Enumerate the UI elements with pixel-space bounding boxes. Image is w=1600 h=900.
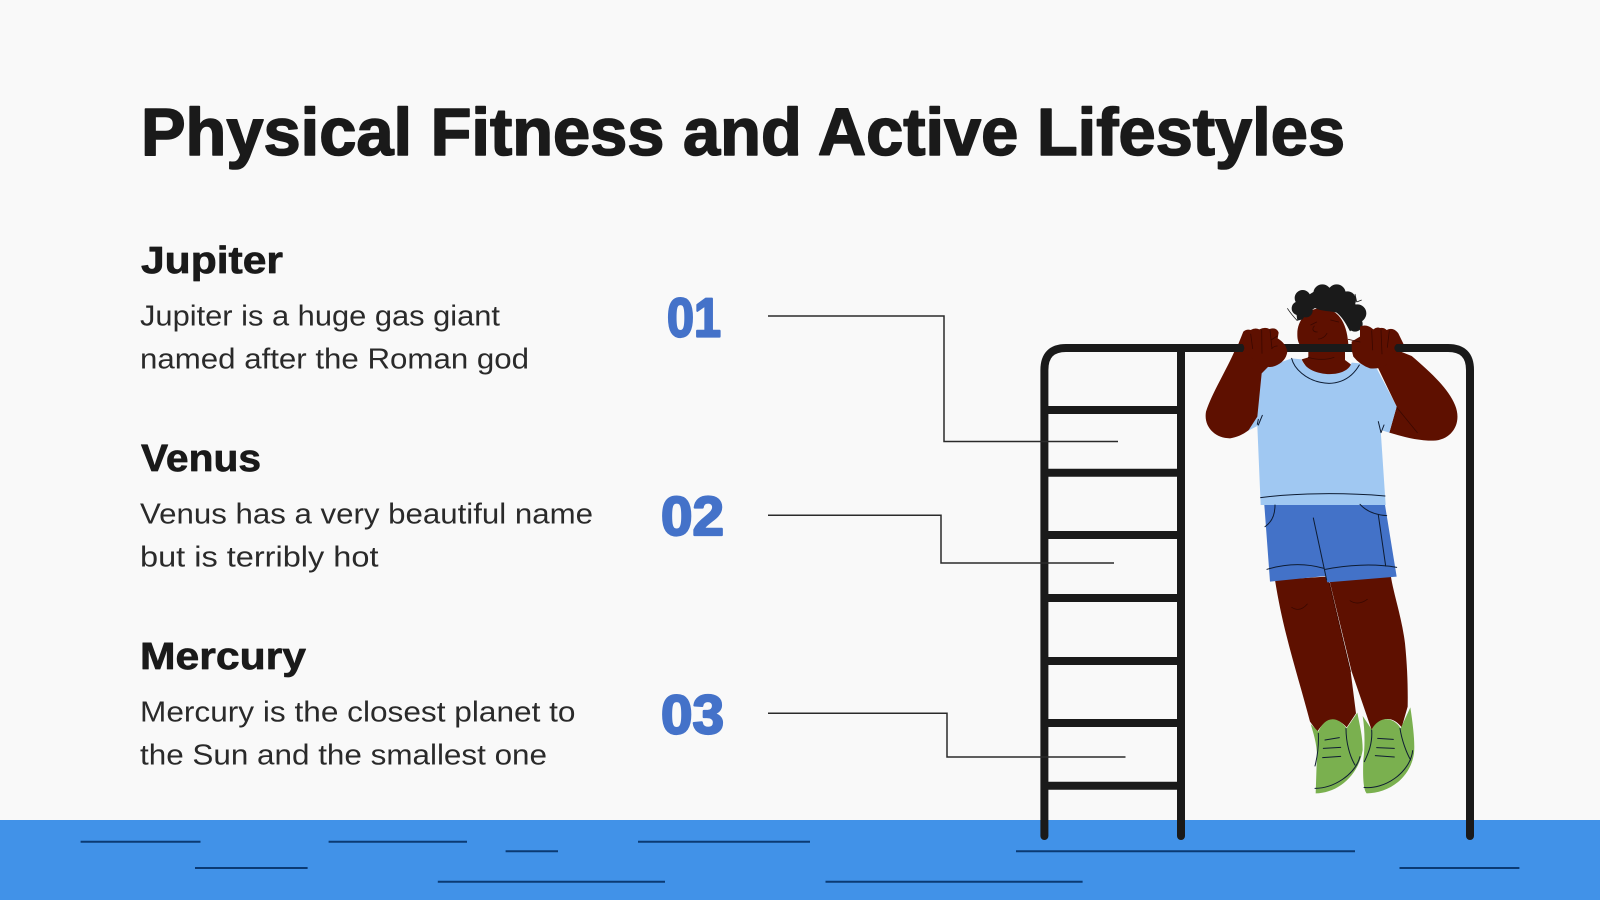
title: Physical Fitness and Active Lifestyles	[141, 95, 1345, 170]
figure: torso and arms	[1206, 325, 1457, 527]
item 2: Venus: Venus has a very beautiful name	[140, 499, 593, 531]
item 1: Jupiter	[140, 240, 529, 376]
figure: legs, shoes and shorts	[1264, 505, 1414, 793]
item 3: Mercury: the Sun and the smallest one	[140, 740, 547, 772]
shorts	[1264, 505, 1397, 582]
figure: head behind bar	[1287, 284, 1366, 376]
leg left	[1275, 577, 1356, 732]
shoe left	[1311, 713, 1363, 793]
t-shirt	[1248, 358, 1397, 527]
item 2: Venus: but is terribly hot	[140, 542, 378, 574]
item 2: Venus: Venus	[141, 438, 261, 480]
number 02: 02	[661, 485, 724, 547]
leg right	[1329, 575, 1408, 730]
bar overlay past fingers	[1230, 344, 1413, 352]
connector line 3	[768, 713, 1126, 757]
connector line 1	[768, 316, 1118, 442]
number 01: 01	[667, 286, 721, 348]
item 3: Mercury: Mercury is the closest planet to	[140, 697, 576, 729]
item 1: Jupiter: named after the Roman god	[140, 344, 529, 376]
connector line 2	[768, 515, 1114, 563]
pull-up frame and ladder	[1044, 348, 1470, 836]
shoe right	[1363, 707, 1414, 793]
item 1: Jupiter: Jupiter	[141, 240, 283, 282]
blue floor band	[0, 820, 1600, 900]
arm left	[1206, 350, 1275, 438]
item 3: Mercury	[140, 636, 576, 772]
fist right	[1348, 325, 1404, 368]
fist left	[1235, 328, 1287, 367]
item 3: Mercury: Mercury	[140, 636, 306, 678]
number 03: 03	[661, 683, 724, 745]
item 2: Venus	[140, 438, 593, 574]
item 1: Jupiter: Jupiter is a huge gas giant	[140, 301, 500, 333]
arm right	[1377, 350, 1457, 441]
